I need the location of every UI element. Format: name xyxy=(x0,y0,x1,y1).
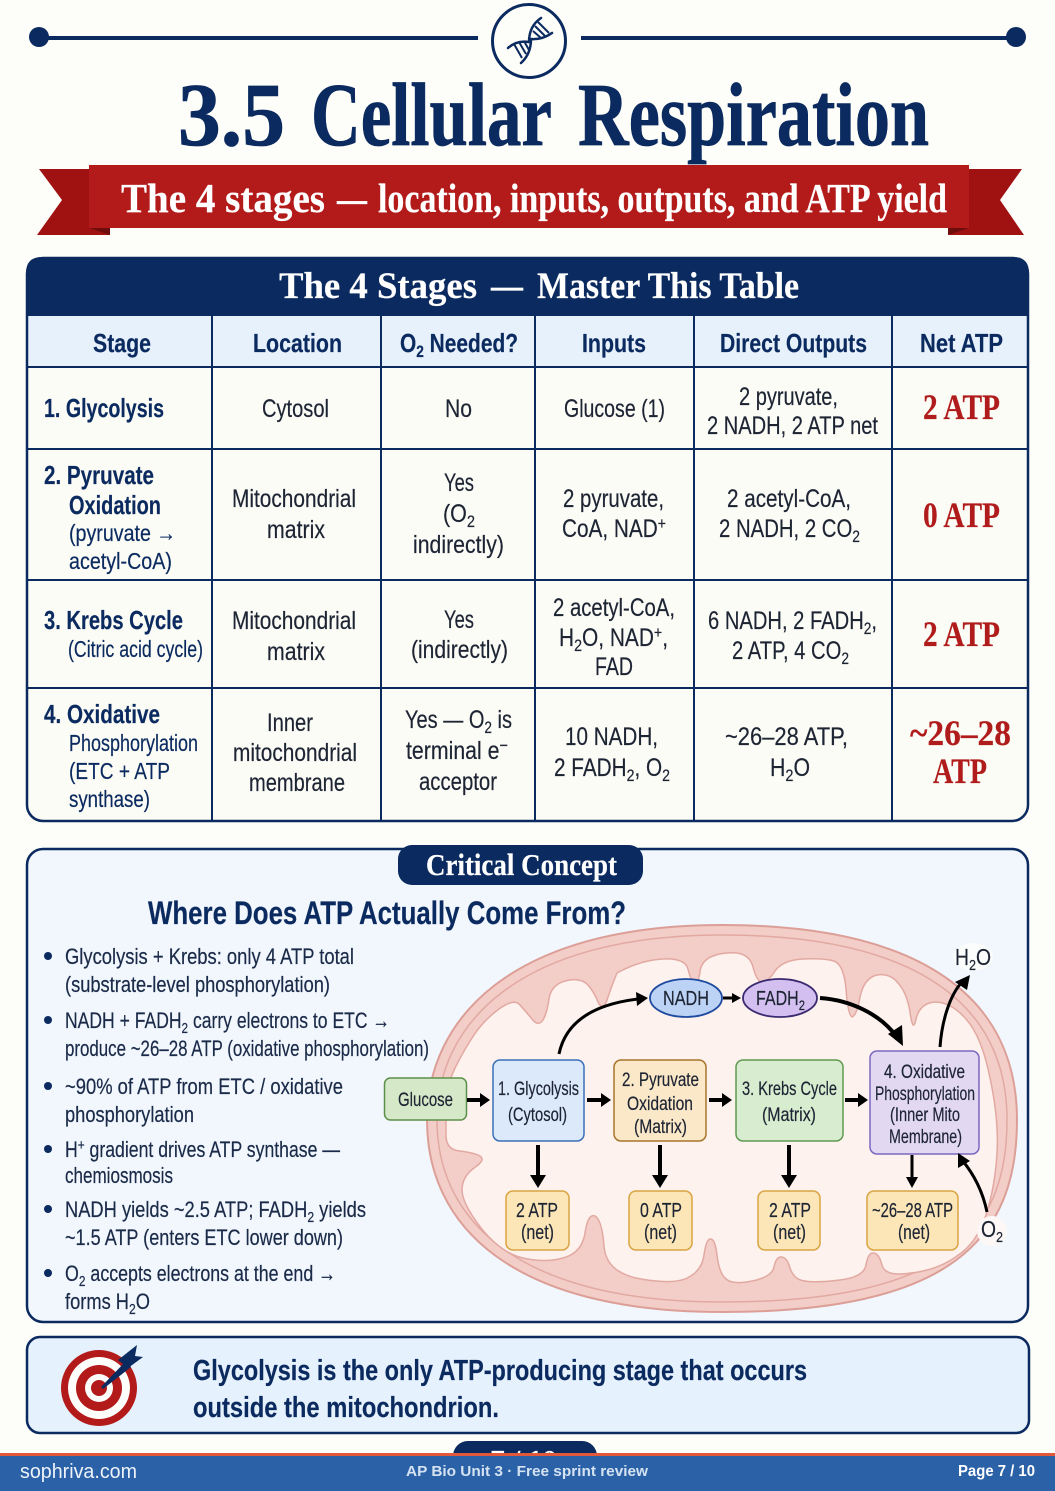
table row: krebs cycle: 2 ATP, 4 CO xyxy=(732,637,867,665)
ATP yield boxes: 2 ATP xyxy=(769,1200,811,1222)
table row: krebs cycle: + xyxy=(654,623,662,642)
label: O2: O xyxy=(981,1216,999,1242)
panel heading: Where Does ATP Actually Come From? xyxy=(148,895,626,931)
node: krebs cycle xyxy=(736,1060,843,1141)
table row: krebs cycle xyxy=(44,594,1000,681)
subtitle ribbon banner: The 4 stages xyxy=(121,175,325,221)
bullet list: 2 xyxy=(182,1020,188,1037)
table column headers: Inputs xyxy=(582,328,646,358)
table row: oxidative phosphorylation: terminal e xyxy=(406,737,516,765)
table row: krebs cycle: Yes xyxy=(444,606,474,634)
table column headers: Stage xyxy=(93,328,151,358)
table row: pyruvate oxidation: Oxidation xyxy=(69,490,161,520)
table row: pyruvate oxidation: 2 NADH, 2 CO xyxy=(719,515,883,543)
node: glucose: Glucose xyxy=(398,1090,453,1111)
table row: oxidative phosphorylation: synthase) xyxy=(69,786,150,812)
label: H2O xyxy=(953,943,993,974)
table title bar: Master This Table xyxy=(537,266,799,307)
table row: krebs cycle: 2 xyxy=(864,619,871,638)
table row: pyruvate oxidation: Yes xyxy=(444,469,474,497)
label: H2O: 2 xyxy=(969,957,976,974)
bullet list: gradient drives ATP synthase — xyxy=(85,1137,340,1162)
page number pill (partly hidden): 7 / 10 xyxy=(490,1445,557,1475)
table row: oxidative phosphorylation: O xyxy=(793,754,810,782)
table row: oxidative phosphorylation: 2 xyxy=(662,766,670,785)
subtitle ribbon banner xyxy=(37,165,1024,235)
table row: krebs cycle: 2 xyxy=(574,636,582,655)
table row: krebs cycle: H xyxy=(559,624,577,652)
table row: glycolysis: 2 ATP xyxy=(923,387,1000,427)
table row: oxidative phosphorylation: Phosphorylation xyxy=(69,730,198,756)
label: H2O: O xyxy=(976,944,991,970)
ATP yield boxes: (net) xyxy=(644,1222,677,1244)
table row: pyruvate oxidation: 2 pyruvate, xyxy=(563,485,664,513)
table row: oxidative phosphorylation: 10 NADH, xyxy=(565,723,658,751)
table row: krebs cycle: 3. Krebs Cycle xyxy=(44,605,183,635)
node: oxidative phosphorylation xyxy=(870,1051,979,1154)
bullet list: (substrate-level phosphorylation) xyxy=(65,972,330,997)
ATP yield boxes: (net) xyxy=(898,1222,930,1244)
table row: oxidative phosphorylation: membrane xyxy=(249,769,345,797)
table row: krebs cycle: (Citric acid cycle) xyxy=(68,636,203,662)
table row: glycolysis: No xyxy=(445,395,472,423)
table row: oxidative phosphorylation: ~26–28 ATP, xyxy=(725,723,848,751)
table row: oxidative phosphorylation: ~26–28 xyxy=(910,713,1011,753)
node: glycolysis xyxy=(493,1060,584,1141)
table row: oxidative phosphorylation: 4. Oxidative xyxy=(44,699,160,729)
panel: stages table xyxy=(26,257,1029,821)
icon: target with dart xyxy=(61,1345,143,1426)
table row: pyruvate oxidation: CoA, NAD xyxy=(562,515,677,543)
table row: pyruvate oxidation: (pyruvate → xyxy=(69,520,176,546)
footer bar: sophriva.com xyxy=(20,1461,137,1483)
table column headers: Location xyxy=(253,328,342,358)
panel: key takeaway callout xyxy=(27,1337,1029,1433)
node: NADH xyxy=(650,979,722,1017)
node: FADH2: FADH xyxy=(756,988,809,1010)
table row: oxidative phosphorylation: 2 xyxy=(785,766,793,785)
label: H2O: H xyxy=(955,944,972,970)
node: glycolysis: 1. Glycolysis xyxy=(498,1079,579,1100)
ATP yield boxes: (net) xyxy=(521,1222,554,1244)
takeaway text: Glycolysis is the only ATP-producing stage that occurs xyxy=(193,1355,807,1387)
header ornament: line with DNA icon xyxy=(29,4,1026,78)
table title bar xyxy=(26,257,1029,316)
table row: glycolysis xyxy=(44,383,1000,440)
bullet list: chemiosmosis xyxy=(65,1163,173,1188)
table column headers: Net ATP xyxy=(920,328,1003,358)
table row: oxidative phosphorylation: 2 FADH xyxy=(554,754,642,782)
bullet list: forms H xyxy=(65,1289,144,1314)
table row: krebs cycle: 2 acetyl-CoA, xyxy=(553,594,675,622)
table row: oxidative phosphorylation: 2 xyxy=(484,718,492,737)
table column headers: Direct Outputs xyxy=(720,328,867,358)
table row: krebs cycle: , xyxy=(871,607,877,635)
table row: krebs cycle: FAD xyxy=(595,653,633,681)
critical concept badge: Critical Concept xyxy=(426,847,618,882)
table row: pyruvate oxidation: indirectly) xyxy=(413,531,504,559)
bullet list: Glycolysis + Krebs: only 4 ATP total xyxy=(65,944,354,969)
table row: krebs cycle: Mitochondrial xyxy=(232,607,356,635)
bullet list: accepts electrons at the end → xyxy=(85,1261,336,1286)
bullet list: ~90% of ATP from ETC / oxidative xyxy=(65,1074,343,1099)
bullet list: + xyxy=(78,1137,85,1154)
subtitle ribbon banner: location, inputs, outputs, and ATP yield xyxy=(378,175,947,221)
table row: pyruvate oxidation: (O xyxy=(443,500,471,528)
node: glucose xyxy=(384,1078,466,1120)
bullet list: phosphorylation xyxy=(65,1102,194,1127)
table column headers: 2 xyxy=(416,342,424,361)
table row: oxidative phosphorylation: H xyxy=(770,754,788,782)
node: pyruvate oxidation: (Matrix) xyxy=(634,1117,687,1138)
table title bar: The 4 Stages xyxy=(279,266,477,307)
bullet list: carry electrons to ETC → xyxy=(188,1008,390,1033)
table row: krebs cycle: 2 xyxy=(841,649,849,668)
table row: oxidative phosphorylation: , O xyxy=(634,754,662,782)
arrows xyxy=(467,975,987,1212)
title: Cellular xyxy=(311,66,552,165)
node: krebs cycle: 3. Krebs Cycle xyxy=(742,1079,837,1100)
node: FADH2 xyxy=(743,979,817,1017)
table column headers xyxy=(27,316,1028,367)
footer bar: AP Bio Unit 3 · Free sprint review xyxy=(406,1463,648,1480)
bullet list: 2 xyxy=(129,1301,136,1318)
bullet list: yields xyxy=(314,1197,366,1222)
table title bar: — xyxy=(490,266,524,307)
table row: oxidative phosphorylation: Yes — O xyxy=(405,706,504,734)
takeaway text: outside the mitochondrion. xyxy=(193,1392,499,1424)
node: oxidative phosphorylation: Phosphorylation xyxy=(875,1084,975,1105)
table row: pyruvate oxidation: 2 xyxy=(852,527,860,546)
table column headers: O xyxy=(400,328,420,358)
label: O2: 2 xyxy=(996,1229,1003,1246)
mitochondrion diagram xyxy=(384,925,1017,1312)
table row: glycolysis: 2 NADH, 2 ATP net xyxy=(707,412,878,440)
bullet list: 2 xyxy=(307,1209,314,1226)
table row: pyruvate oxidation: 2 acetyl-CoA, xyxy=(727,485,851,513)
bullet list: 2 xyxy=(79,1273,85,1290)
table column headers: Needed? xyxy=(424,328,518,358)
footer bar xyxy=(0,1453,1055,1491)
table row: krebs cycle: 6 NADH, 2 FADH xyxy=(708,607,901,635)
table row: oxidative phosphorylation: is xyxy=(492,706,512,734)
node: oxidative phosphorylation: Membrane) xyxy=(889,1127,962,1148)
takeaway text xyxy=(193,1355,807,1424)
table row: oxidative phosphorylation: 2 xyxy=(627,766,634,785)
mitochondrion membranes xyxy=(427,925,1017,1312)
title xyxy=(178,66,929,165)
node: pyruvate oxidation: 2. Pyruvate xyxy=(622,1070,699,1091)
node: oxidative phosphorylation: (Inner Mito xyxy=(890,1105,960,1126)
table row: krebs cycle: O, NAD xyxy=(582,624,654,652)
table row: glycolysis: 1. Glycolysis xyxy=(44,393,164,423)
node: FADH2: 2 xyxy=(799,997,805,1013)
title: 3.5 xyxy=(178,66,285,165)
bullet list: ~1.5 ATP (enters ETC lower down) xyxy=(65,1225,343,1250)
table row: oxidative phosphorylation: acceptor xyxy=(419,768,497,796)
node: oxidative phosphorylation: 4. Oxidative xyxy=(884,1062,965,1083)
ATP yield boxes: 2 ATP xyxy=(516,1200,558,1222)
table row: oxidative phosphorylation: Inner xyxy=(267,709,313,737)
table row: pyruvate oxidation: 2. Pyruvate xyxy=(44,460,154,490)
table row: krebs cycle: matrix xyxy=(267,638,325,666)
table row: pyruvate oxidation: Mitochondrial xyxy=(232,485,356,513)
node: pyruvate oxidation: Oxidation xyxy=(627,1094,693,1115)
ATP yield boxes: (net) xyxy=(773,1222,806,1244)
table row: krebs cycle: , xyxy=(662,624,668,652)
table row: oxidative phosphorylation: mitochondrial xyxy=(233,739,357,767)
table row: glycolysis: Glucose (1) xyxy=(564,395,665,423)
bullet list: H xyxy=(65,1137,81,1162)
table row: pyruvate oxidation xyxy=(44,460,1000,574)
bullet list: O xyxy=(65,1261,83,1286)
ATP yield boxes xyxy=(506,1191,958,1250)
bullet list: produce ~26–28 ATP (oxidative phosphorylation) xyxy=(65,1036,429,1061)
table row: pyruvate oxidation: 2 xyxy=(467,512,475,531)
table row: glycolysis: Cytosol xyxy=(262,395,329,423)
bullet list xyxy=(44,944,429,1318)
table row: oxidative phosphorylation: ATP xyxy=(933,751,987,791)
table row: pyruvate oxidation: matrix xyxy=(267,516,325,544)
subtitle ribbon banner: — xyxy=(336,175,368,221)
bullet list: NADH yields ~2.5 ATP; FADH xyxy=(65,1197,363,1222)
ATP yield boxes: ~26–28 ATP xyxy=(872,1200,953,1222)
node: krebs cycle: (Matrix) xyxy=(762,1105,816,1126)
table row: pyruvate oxidation: acetyl-CoA) xyxy=(69,548,172,574)
label: O2 xyxy=(977,1216,1007,1246)
page number pill (partly hidden) xyxy=(453,1441,597,1475)
table row: krebs cycle: 2 ATP xyxy=(923,614,1000,654)
table row: oxidative phosphorylation: − xyxy=(500,736,508,755)
bullet list: NADH + FADH xyxy=(65,1008,214,1033)
table row: glycolysis: 2 pyruvate, xyxy=(739,383,838,411)
table row: krebs cycle: (indirectly) xyxy=(411,636,508,664)
node: pyruvate oxidation xyxy=(614,1060,706,1141)
table row: pyruvate oxidation: + xyxy=(658,514,666,533)
panel: critical concept xyxy=(27,845,1028,1322)
title: Respiration xyxy=(578,66,929,165)
footer bar: Page 7 / 10 xyxy=(958,1463,1035,1480)
table row: oxidative phosphorylation: (ETC + ATP xyxy=(69,758,170,784)
node: NADH: NADH xyxy=(663,988,709,1010)
ATP yield boxes: 0 ATP xyxy=(640,1200,682,1222)
table row: oxidative phosphorylation xyxy=(44,699,1011,812)
bullet list: O xyxy=(136,1289,150,1314)
table row: pyruvate oxidation: 0 ATP xyxy=(923,495,1000,535)
node: glycolysis: (Cytosol) xyxy=(508,1105,567,1126)
